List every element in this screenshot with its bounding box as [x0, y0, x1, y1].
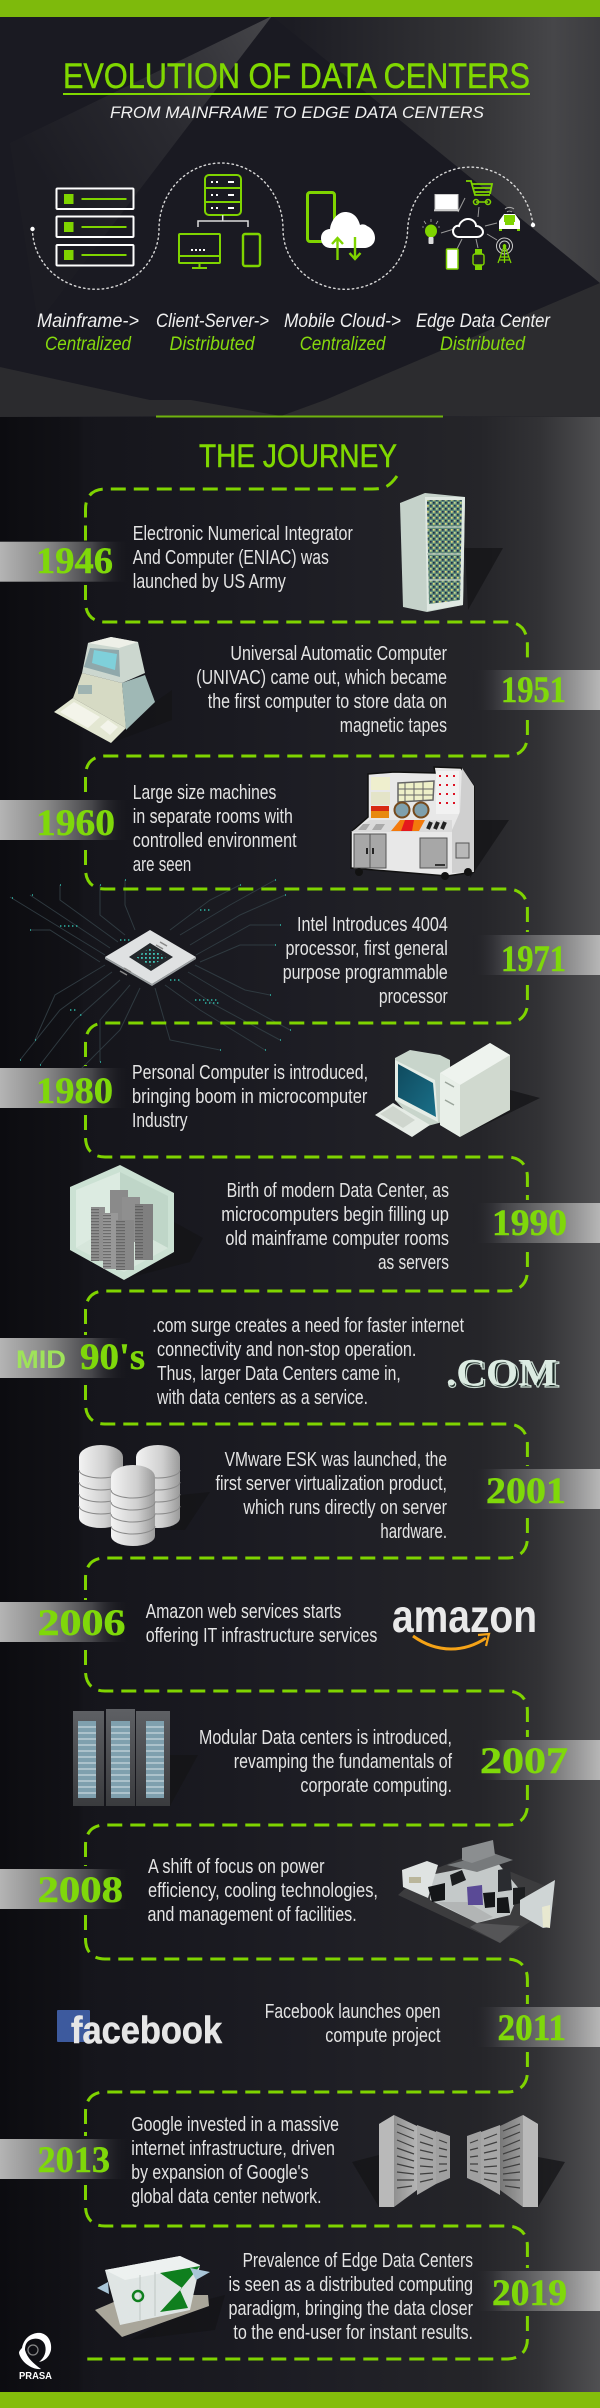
entry 1960: Large size machines — [133, 781, 276, 804]
labels: architectures: Mainframe-> — [37, 311, 139, 332]
entry 1980: 1980 — [36, 1071, 113, 1112]
entry 1960: controlled environment — [133, 829, 297, 852]
entry 1980 — [36, 1061, 368, 1132]
logo: amazon: amazon — [392, 1590, 537, 1642]
entry 2001: VMware ESK was launched, the — [225, 1448, 447, 1471]
labels: architectures: Distributed — [440, 334, 526, 355]
entry 1980: bringing boom in microcomputer — [132, 1085, 368, 1108]
entry mid 90s: with data centers as a service. — [156, 1386, 368, 1409]
entry 2011: compute project — [325, 2024, 441, 2047]
title: EVOLUTION OF DATA CENTERS — [63, 57, 530, 96]
entry 1990: as servers — [378, 1251, 449, 1274]
top bar — [0, 0, 600, 17]
icon: processor chip — [105, 930, 196, 986]
entry 2008: A shift of focus on power — [148, 1855, 325, 1878]
entry 1946 — [36, 522, 353, 593]
entry 2001 — [216, 1448, 566, 1543]
entry 1951: (UNIVAC) came out, which became — [196, 666, 447, 689]
entry 2007: revamping the fundamentals of — [234, 1750, 452, 1773]
entry 1960: are seen — [133, 853, 191, 876]
entry 2006: 2006 — [38, 1603, 126, 1644]
entry mid 90s: MID — [16, 1346, 66, 1374]
logo: PRASA: PRASA — [19, 2370, 52, 2382]
icon: .COM wordmark: .COM — [446, 1352, 557, 1394]
icon: edge data center network — [422, 181, 520, 270]
entry 1971: 1971 — [501, 939, 566, 980]
icon: ENIAC cabinet — [400, 493, 503, 612]
entry 1971 — [283, 913, 566, 1008]
entry mid 90s: connectivity and non-stop operation. — [157, 1338, 416, 1361]
entry 2019: 2019 — [492, 2273, 567, 2314]
icon: personal computer — [375, 1043, 540, 1137]
entry 1946: And Computer (ENIAC) was — [133, 546, 329, 569]
entry 2013: by expansion of Google's — [131, 2161, 308, 2184]
labels: architectures: Centralized — [45, 334, 132, 355]
entry 1960 — [36, 781, 297, 876]
entry mid 90s: Thus, larger Data Centers came in, — [157, 1362, 401, 1385]
entry 1960: 1960 — [36, 803, 115, 844]
entry 2013: Google invested in a massive — [131, 2113, 339, 2136]
icon: modular racks — [73, 1709, 198, 1806]
entry 2007: 2007 — [480, 1741, 568, 1782]
labels: architectures: Distributed — [170, 334, 256, 355]
entry mid 90s: .com surge creates a need for faster internet — [152, 1314, 464, 1337]
entry 2006 — [38, 1600, 377, 1647]
bottom bar — [0, 2392, 600, 2408]
heading: the journey: THE JOURNEY — [199, 438, 397, 474]
year bands — [0, 542, 600, 2311]
entry 1971: processor, first general — [286, 937, 448, 960]
entry 1951 — [196, 642, 566, 737]
dotted wave connector — [30, 163, 535, 289]
entry mid 90s — [16, 1314, 464, 1409]
labels: architectures — [37, 311, 551, 355]
entry 1980: Personal Computer is introduced, — [132, 1061, 368, 1084]
entry 1951: Universal Automatic Computer — [230, 642, 447, 665]
icon: data center facility cutaway — [398, 1840, 557, 1943]
logo: PRASA — [19, 2333, 52, 2382]
entry mid 90s: 90's — [80, 1337, 145, 1378]
icon: storage disks — [79, 1445, 210, 1546]
entry 2011: Facebook launches open — [265, 2000, 440, 2023]
entry 1990 — [221, 1179, 567, 1274]
labels: architectures: Centralized — [300, 334, 387, 355]
entry 1990: 1990 — [492, 1203, 567, 1244]
entry 2006: Amazon web services starts — [146, 1600, 341, 1623]
entry 1946: launched by US Army — [133, 570, 286, 593]
entry 2013: 2013 — [38, 2140, 110, 2181]
entry 2019 — [228, 2249, 567, 2344]
icon: modern data center room — [70, 1165, 203, 1280]
entry 2008: and management of facilities. — [148, 1903, 357, 1926]
circuit board background — [10, 880, 291, 1080]
icon: .COM wordmark: .COM — [447, 1354, 560, 1396]
entry 1971: processor — [379, 985, 448, 1008]
entry 2019: paradigm, bringing the data closer — [228, 2297, 473, 2320]
entry 1980: Industry — [132, 1109, 188, 1132]
icon: google server racks — [352, 2115, 565, 2207]
entry 1946: 1946 — [36, 541, 113, 582]
entry 1951: magnetic tapes — [340, 714, 447, 737]
entry 2001: which runs directly on server — [243, 1496, 447, 1519]
header background — [0, 0, 600, 417]
icon: UNIVAC terminal — [54, 637, 172, 743]
entry 1946: Electronic Numerical Integrator — [133, 522, 353, 545]
entry 1951: 1951 — [501, 670, 566, 711]
icon: client server network — [179, 175, 260, 268]
entry 2008: 2008 — [38, 1870, 123, 1911]
entry 1971: Intel Introduces 4004 — [297, 913, 448, 936]
entry 2013: internet infrastructure, driven — [131, 2137, 335, 2160]
entry 2019: is seen as a distributed computing — [228, 2273, 473, 2296]
logo: facebook: facebook — [71, 2010, 223, 2052]
entry 2008 — [38, 1855, 378, 1926]
entry 1990: Birth of modern Data Center, as — [227, 1179, 449, 1202]
entry 2007 — [199, 1726, 568, 1797]
entry 2006: offering IT infrastructure services — [146, 1624, 377, 1647]
labels: architectures: Edge Data Center — [416, 311, 551, 332]
entry 2001: hardware. — [380, 1520, 447, 1543]
labels: architectures: Client-Server-> — [156, 311, 269, 332]
icon: mainframe servers — [56, 188, 134, 266]
entry 1971: purpose programmable — [283, 961, 448, 984]
icon: edge data center container — [95, 2256, 225, 2340]
entry 2013: global data center network. — [131, 2185, 322, 2208]
labels: architectures: Mobile Cloud-> — [284, 311, 401, 332]
entry 2001: 2001 — [486, 1471, 566, 1512]
entry 2019: to the end-user for instant results. — [233, 2321, 473, 2344]
entry 2001: first server virtualization product, — [216, 1472, 447, 1495]
entry 2008: efficiency, cooling technologies, — [148, 1879, 378, 1902]
entry 2007: corporate computing. — [300, 1774, 452, 1797]
timeline dashed path — [86, 476, 527, 2359]
entry 2011 — [265, 2000, 566, 2049]
entry 2007: Modular Data centers is introduced, — [199, 1726, 452, 1749]
entry 1960: in separate rooms with — [133, 805, 293, 828]
subtitle: FROM MAINFRAME TO EDGE DATA CENTERS — [110, 103, 485, 122]
section divider — [156, 416, 443, 418]
entry 1990: old mainframe computer rooms — [225, 1227, 449, 1250]
entry 2011: 2011 — [498, 2008, 566, 2049]
entry 2013 — [38, 2113, 339, 2208]
icon: mobile cloud — [308, 192, 375, 260]
entry 1990: microcomputers begin filling up — [221, 1203, 449, 1226]
entry 1951: the first computer to store data on — [208, 690, 447, 713]
entry 2019: Prevalence of Edge Data Centers — [243, 2249, 473, 2272]
icon: 1960s control console — [351, 767, 509, 880]
